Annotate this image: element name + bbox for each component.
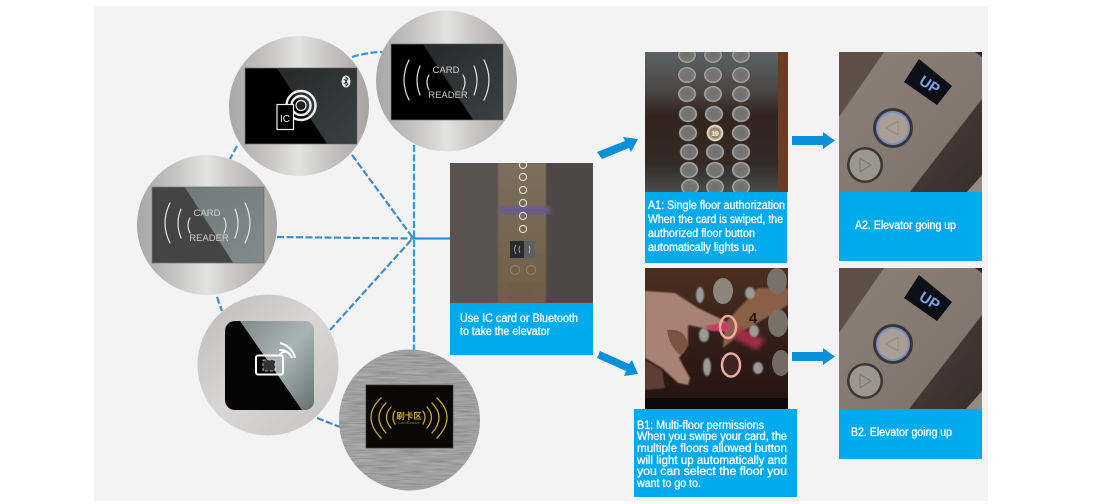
caption: automatically lights up.: [648, 242, 757, 254]
panel: A1 single floor authorization: [645, 46, 788, 263]
dashed connectors from card readers to the hub: [217, 52, 450, 427]
photo: floor buttons with floor 19 lit: [645, 52, 788, 192]
photo: finger pressing lit buttons: [645, 268, 788, 409]
caption: When the card is swiped, the: [648, 214, 783, 226]
caption: want to go to.: [636, 478, 701, 490]
caption: [645, 192, 787, 263]
arrow: A1 to A2: [792, 132, 835, 149]
icon: Bluetooth: [342, 76, 350, 88]
circle: IC card and Bluetooth reader: [229, 36, 369, 176]
caption: you can select the floor you: [637, 466, 787, 478]
icon: card with wireless waves: [256, 343, 295, 374]
caption: [634, 409, 797, 497]
arrow: to single floor path: [597, 137, 638, 159]
caption: Use IC card or Bluetooth: [460, 313, 578, 325]
reader panel: 刷卡区: [396, 411, 422, 421]
caption: B2. Elevator going up: [851, 427, 952, 439]
caption: to take the elevator: [460, 326, 550, 338]
caption: A1: Single floor authorization: [648, 200, 785, 212]
reader panel: CARD: [433, 65, 460, 76]
arrow: B1 to B2: [792, 348, 835, 365]
reader panel: READER: [189, 233, 229, 244]
circle: rounded wireless reader: [198, 294, 338, 436]
photo: finger pressing lit buttons: 4: [749, 310, 758, 327]
caption: multiple floors allowed button: [637, 443, 787, 455]
reader panel: [391, 44, 503, 120]
caption: [450, 303, 593, 355]
reader panel: [225, 321, 314, 410]
reader panel: [366, 385, 453, 448]
panel: use IC card or Bluetooth: [450, 161, 593, 355]
icon: IC card with rings: IC: [280, 114, 290, 125]
caption: [839, 409, 982, 459]
reader panel: [152, 187, 264, 263]
caption: B1: Multi-floor permissions: [637, 420, 764, 432]
photo: up display and call buttons: [839, 268, 982, 409]
circle: black card reader: [376, 10, 517, 152]
panel: B2 elevator going up: [839, 268, 982, 459]
caption: [839, 192, 982, 261]
panel: B1 multi-floor permissions: [634, 268, 797, 497]
circle: brushed metal reader with gold marking: [339, 350, 480, 490]
background panel: [94, 6, 988, 501]
circle: grey card reader: [137, 155, 277, 295]
caption: When you swipe your card, the: [637, 431, 787, 443]
panel: A2 elevator going up: [839, 52, 982, 261]
arrow: to multi floor path: [597, 351, 638, 376]
photo: elevator call panel: [450, 163, 593, 303]
reader panel: READER: [428, 90, 468, 101]
caption: will light up automatically and: [636, 455, 787, 467]
photo: floor buttons with floor 19 lit: 19: [711, 131, 719, 138]
reader panel: CardReader: [398, 420, 421, 425]
reader panel: CARD: [194, 208, 221, 219]
photo: up display and call buttons: [839, 52, 982, 192]
caption: A2. Elevator going up: [855, 220, 956, 232]
caption: authorized floor button: [648, 228, 755, 240]
